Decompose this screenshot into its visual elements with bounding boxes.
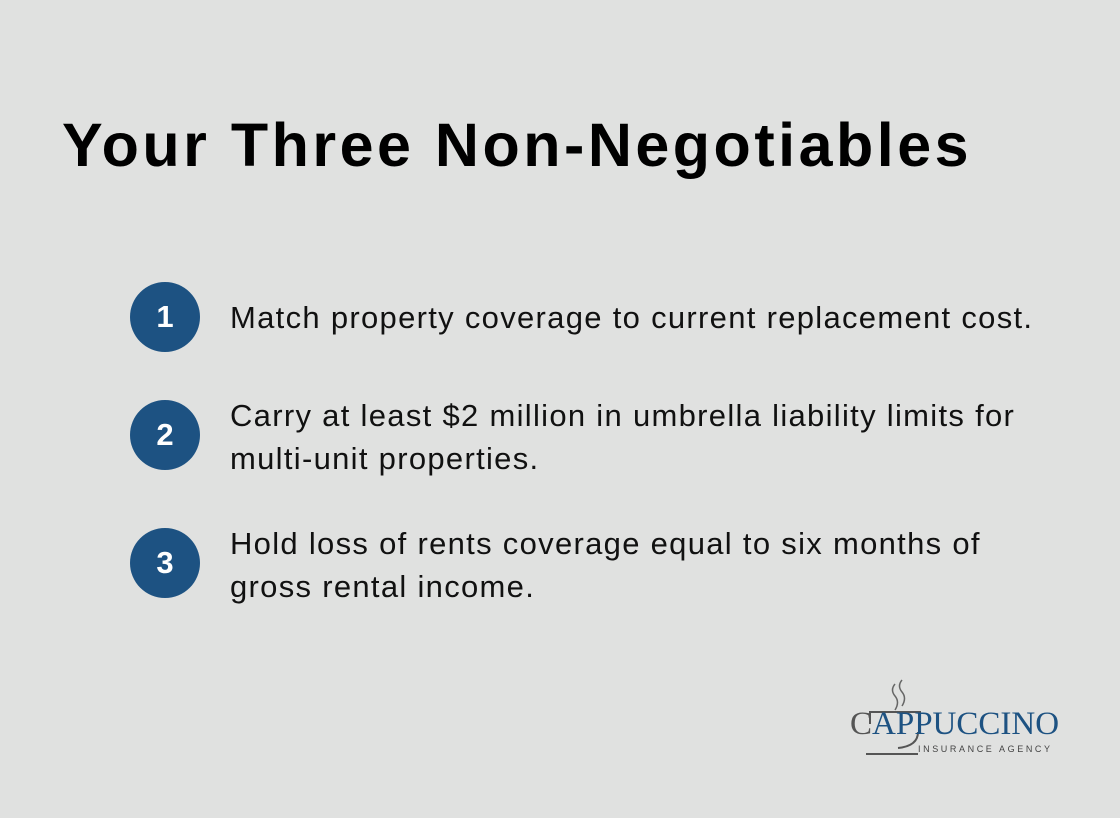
logo: CAPPUCCINO: [850, 706, 1059, 742]
badge 2: 2: [156, 417, 174, 452]
text 2: Carry at least $2 million in umbrella liability limits for: [230, 398, 1015, 433]
item 3: [130, 526, 981, 604]
text 3: [230, 526, 981, 604]
badge 2: [130, 400, 200, 470]
text 2: [230, 398, 1015, 476]
badge 1: [130, 282, 200, 352]
text 1: Match property coverage to current replacement cost.: [230, 300, 1033, 335]
logo: INSURANCE AGENCY: [918, 744, 1053, 754]
item 1: [130, 282, 1033, 352]
badge 1: 1: [156, 299, 174, 334]
badge 3: 3: [156, 545, 174, 580]
text 3: gross rental income.: [230, 569, 535, 604]
badge 3: [130, 528, 200, 598]
text 3: Hold loss of rents coverage equal to six months of: [230, 526, 981, 561]
title: Your Three Non-Negotiables: [62, 111, 972, 179]
text 2: multi-unit properties.: [230, 441, 539, 476]
logo: [850, 680, 1059, 755]
item 2: [130, 398, 1015, 476]
